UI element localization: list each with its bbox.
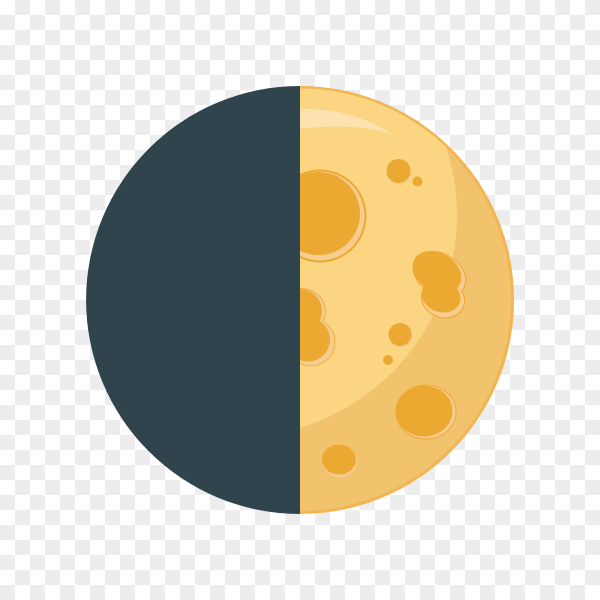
crater: small lower (322, 444, 357, 478)
crater: tiny upper dot (412, 176, 422, 186)
lit half base (300, 86, 514, 514)
crater: large upper (300, 170, 366, 262)
crater: large lower (396, 385, 456, 439)
crater: medium center (388, 322, 414, 348)
crater: double left (300, 288, 336, 366)
highlight (300, 109, 392, 134)
moon: lit half (300, 86, 514, 514)
moon: shadowed half (86, 86, 300, 514)
crater: tiny center dot (383, 355, 393, 365)
crater: small upper (386, 159, 412, 185)
crater: double right (412, 250, 466, 318)
bright inner region (300, 88, 457, 428)
